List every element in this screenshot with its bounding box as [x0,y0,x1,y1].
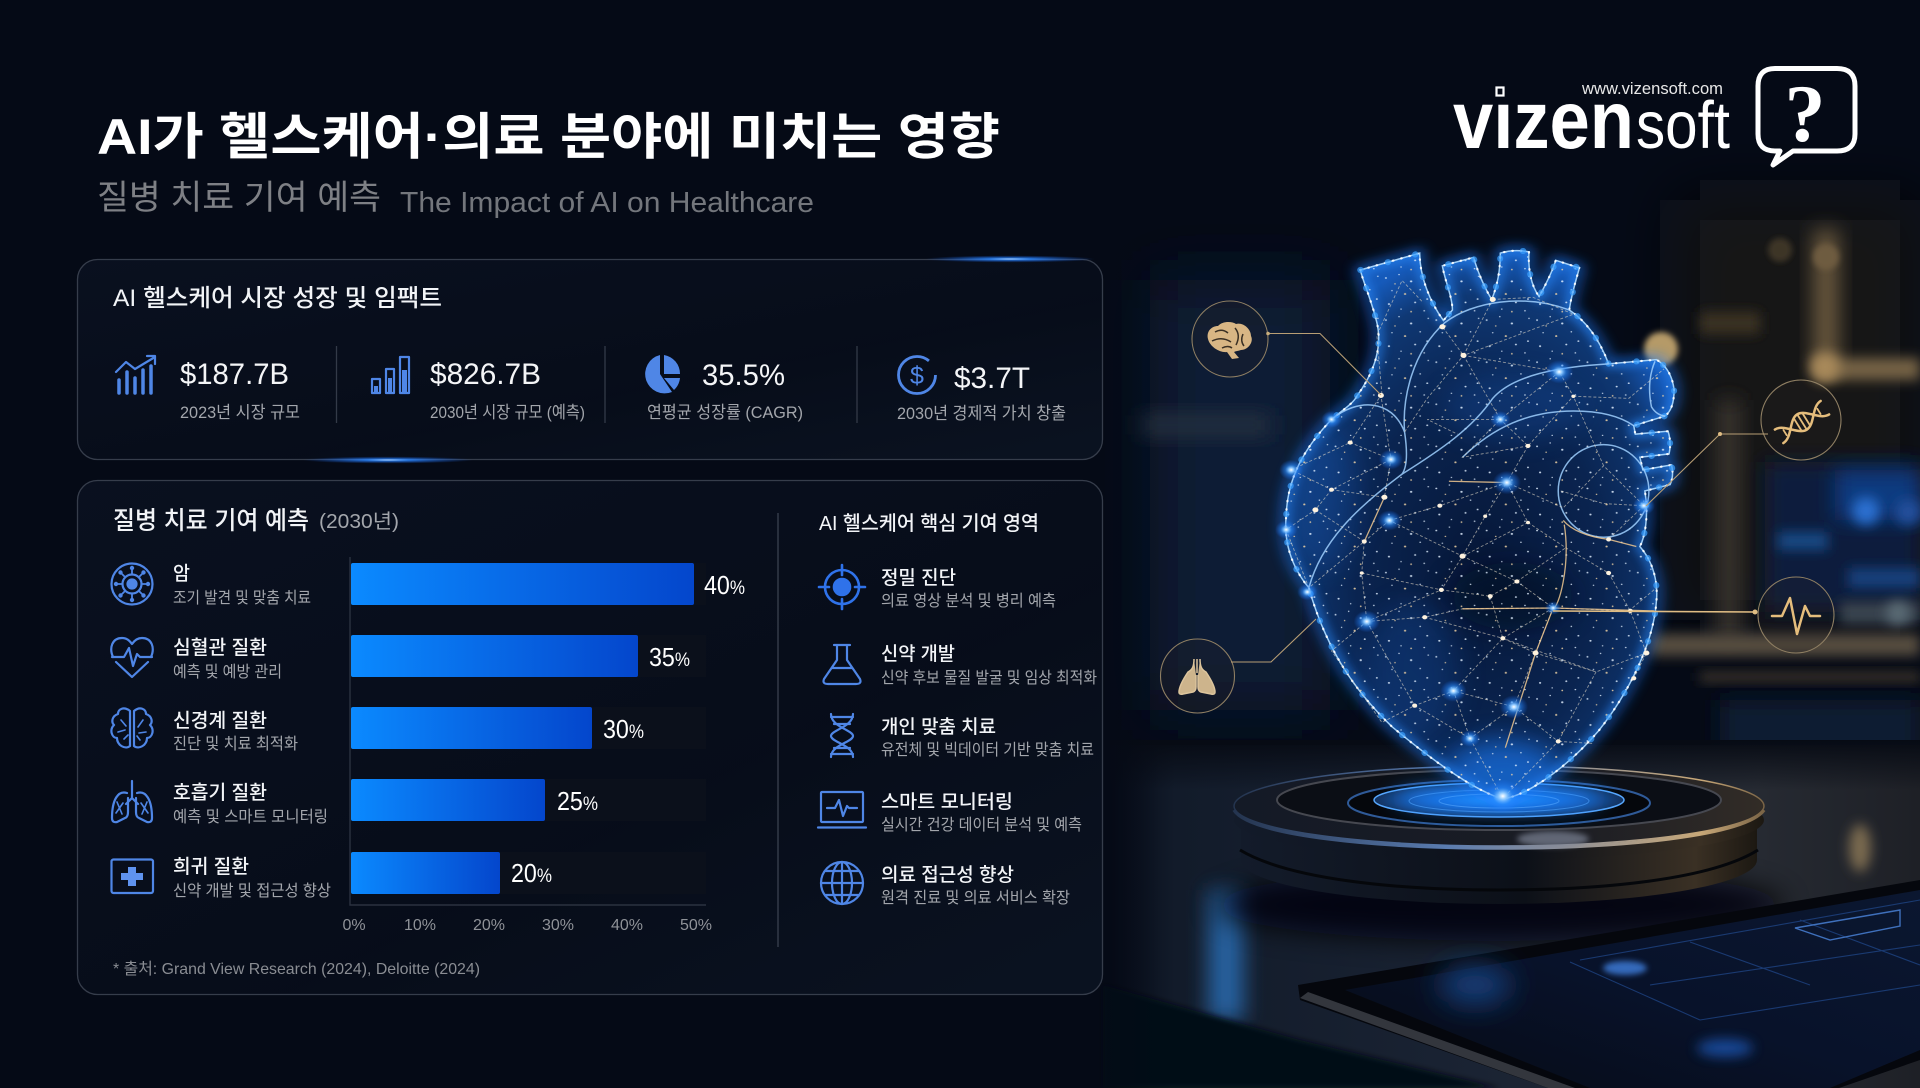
metric: economic value [897,356,1066,423]
item: smart monitoring: 실시간 건강 데이터 분석 및 예측 [881,816,1082,834]
bar chart [342,557,745,934]
heart mesh lines [1286,281,1664,798]
bar: rare disease 20%: 20% [511,858,552,888]
label: cancer [173,563,311,607]
left fade over hero [1090,0,1160,1088]
icon: gold pulse line [1772,598,1820,634]
subtitle [97,179,814,219]
icon: cancer cell [112,564,152,604]
panel heading: 질병 치료 기여 예측 [113,507,309,535]
metric: 2030 market size: 2030년 시장 규모 (예측) [430,403,585,422]
axis tick labels: 50% [680,917,712,934]
item: drug development: 신약 후보 물질 발굴 및 임상 최적화 [881,669,1097,687]
callout: pulse [1553,577,1834,653]
heart gold highlights [1364,481,1654,748]
callout: brain [1192,301,1381,395]
bar: neurological 30% [351,707,644,749]
bar: cardiovascular 35% [351,635,690,677]
item: personalized treatment: 유전체 및 빅데이터 기반 맞춤 치료 [881,741,1094,759]
label: neurological [173,710,298,753]
axis tick labels [342,917,712,934]
blurred laboratory backdrop [1140,200,1920,770]
metric: economic value: 2030년 경제적 가치 창출 [897,404,1066,423]
item: precision diagnosis: 의료 영상 분석 및 병리 예측 [881,592,1056,610]
item: precision diagnosis: 정밀 진단 [881,567,956,589]
item: access to care: 원격 진료 및 의료 서비스 확장 [881,889,1070,907]
label: cardiovascular [173,637,282,681]
pedestal [1234,766,1764,904]
panel glow accents [303,256,1095,464]
icon: gold brain [1208,322,1252,359]
heart bright nodes [1275,360,1655,813]
label: respiratory: 호흡기 질환 [173,782,267,804]
icon: neurological brain [111,708,153,747]
source note: * 출처: Grand View Research (2024), Deloitte (2024) [113,960,480,978]
metric: 2030 market size: $826.7B [430,358,541,391]
icon: question speech bubble: ? [1784,68,1826,159]
icon: gold lungs [1179,659,1215,694]
label: cancer: 조기 발견 및 맞춤 치료 [173,589,311,607]
icon: precision target [819,565,865,609]
icon: globe [821,862,863,904]
axis tick labels: 0% [342,917,366,934]
logo: vizensoft [1453,68,1855,166]
icon: flask [824,645,860,684]
item: personalized treatment: 개인 맞춤 치료 [881,716,996,738]
tablet on table [1298,880,1920,1088]
metric: CAGR: 연평균 성장률 (CAGR) [647,403,803,422]
label: respiratory: 예측 및 스마트 모니터링 [173,808,328,826]
panel heading: AI 헬스케어 시장 성장 및 임팩트 [113,285,442,312]
logo: vizensoft: www.vizensoft.com [1581,80,1723,98]
label: cardiovascular: 예측 및 예방 관리 [173,663,282,681]
label: neurological: 진단 및 치료 최적화 [173,735,298,753]
logo: vizensoft: vızen [1453,75,1634,166]
metric: economic value: $ [910,362,924,390]
icon: question speech bubble [1758,68,1855,165]
metric: 2023 market size: 2023년 시장 규모 [180,403,300,422]
bar: respiratory 25%: 25% [557,786,598,816]
metric: economic value: $3.7T [954,362,1030,395]
callout: lungs [1160,619,1316,713]
axis tick labels: 20% [473,917,505,934]
icon: DNA [831,714,853,757]
axis tick labels: 40% [611,917,643,934]
metric: 2030 market size [372,357,585,422]
icon: laptop monitor [818,792,866,828]
panel heading: (2030년) [319,510,399,533]
icon: rare disease medical cross [112,860,153,893]
panel: market growth and impact [78,256,1102,464]
label: rare disease: 희귀 질환 [173,856,249,878]
label: cardiovascular: 심혈관 질환 [173,637,267,659]
subtitle: The Impact of AI on Healthcare [400,187,814,219]
label: respiratory [173,782,328,826]
bar: neurological 30%: 30% [603,714,644,744]
metric: CAGR [645,355,803,422]
item: access to care: 의료 접근성 향상 [881,864,1014,886]
metric: 2023 market size [116,356,300,422]
axis tick labels: 30% [542,917,574,934]
item: access to care [881,864,1070,907]
logo: vizensoft: soft [1636,88,1730,163]
item: precision diagnosis [881,567,1056,610]
item: smart monitoring: 스마트 모니터링 [881,791,1013,813]
bar: cardiovascular 35%: 35% [649,642,690,672]
label: rare disease: 신약 개발 및 접근성 향상 [173,882,331,900]
icon: cardiovascular heart [111,638,153,677]
heart anatomical contours [1309,301,1665,588]
bar: rare disease 20% [351,852,552,894]
table surface [1103,740,1920,1088]
metric: CAGR: 35.5% [702,359,785,392]
item: drug development [881,643,1097,687]
bar: cancer 40% [351,563,745,605]
item: drug development: 신약 개발 [881,643,955,665]
title: AI가 헬스케어·의료 분야에 미치는 영향 [97,109,1000,165]
axis tick labels: 10% [404,917,436,934]
icon: respiratory lungs [112,781,152,822]
heading: key contribution areas: AI 헬스케어 핵심 기여 영역 [819,512,1039,535]
subtitle: 질병 치료 기여 예측 [97,179,381,217]
label: neurological: 신경계 질환 [173,710,267,732]
icon: gold DNA helix [1774,400,1830,444]
callout: DNA [1646,380,1841,506]
item: personalized treatment [881,716,1094,759]
label: cancer: 암 [173,563,190,585]
metric: 2023 market size: $187.7B [180,358,289,391]
label: rare disease [173,856,331,900]
panel: disease contribution forecast [78,480,1102,994]
item: smart monitoring [881,791,1082,834]
bar: respiratory 25% [351,779,598,821]
glowing holographic heart [1275,251,1674,815]
bar: cancer 40%: 40% [704,570,745,600]
